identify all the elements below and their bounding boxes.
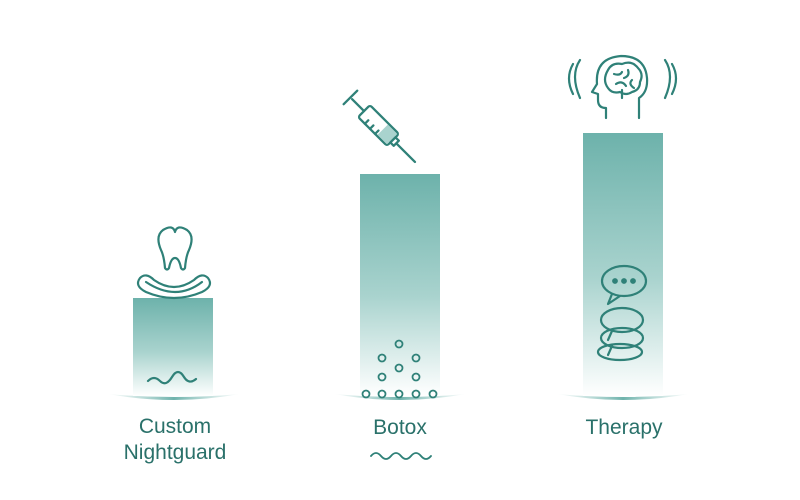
icon: dots [362, 340, 436, 398]
icon: syringe [344, 91, 422, 169]
icon: head with brain [569, 56, 676, 118]
base shadow [108, 394, 240, 400]
label: therapy: Therapy [585, 416, 663, 439]
label: custom nightguard [124, 415, 226, 464]
base shadow [334, 394, 466, 400]
icon: nightguard [138, 275, 210, 298]
label: custom nightguard: Nightguard [124, 441, 226, 464]
label: custom nightguard: Custom [139, 415, 211, 438]
bar: therapy [583, 133, 663, 396]
icon: tooth [158, 227, 192, 270]
icon: chat bubbles [598, 266, 646, 360]
bar: botox [360, 174, 440, 396]
panel: therapy [557, 56, 689, 439]
icon: wave [148, 372, 196, 383]
icon: squiggle [371, 453, 431, 459]
base shadow [557, 394, 689, 400]
label: botox: Botox [373, 416, 427, 439]
panel: custom nightguard [108, 227, 240, 464]
panel: botox [334, 91, 466, 459]
bar: nightguard [133, 298, 213, 396]
